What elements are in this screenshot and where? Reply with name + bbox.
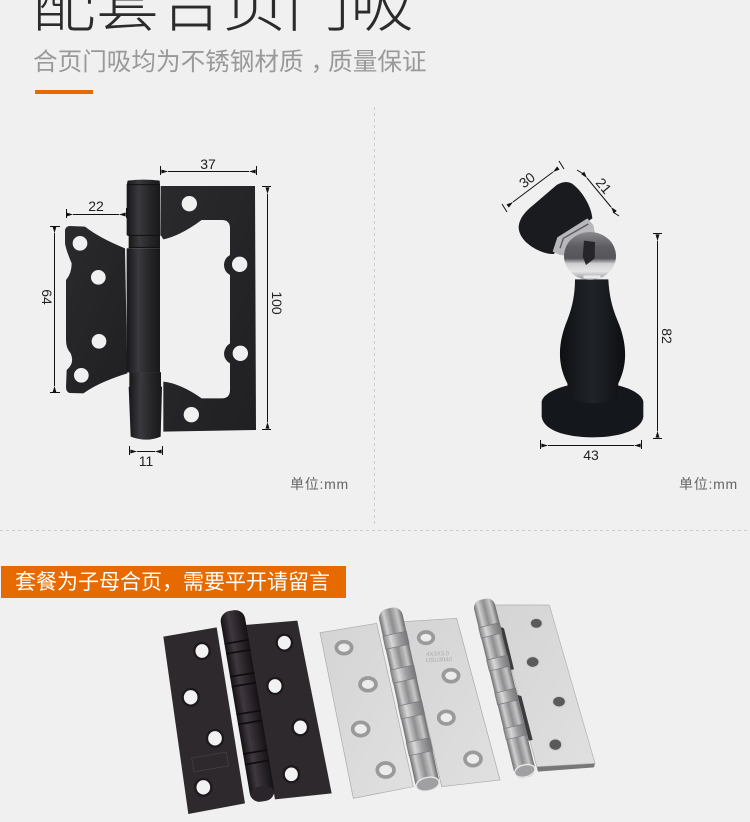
steel hinge folded	[472, 597, 595, 780]
stopper chrome collar	[553, 218, 595, 257]
orange accent bar	[35, 90, 93, 94]
stopper dimension lines	[502, 161, 662, 449]
dimension: 22: 22	[88, 198, 104, 214]
dimension: 37: 37	[200, 156, 216, 172]
door stopper drawing	[519, 182, 643, 437]
hinge right leaf	[161, 186, 256, 432]
hinge dimension lines	[50, 166, 271, 455]
steel hinge open: USU3040	[426, 657, 453, 664]
dimension: 82: 82	[659, 328, 675, 344]
dimension: 30: 30	[516, 169, 538, 191]
banner: package note	[1, 566, 346, 598]
dimension: 64: 64	[39, 289, 55, 305]
black ball-bearing hinge	[163, 609, 332, 814]
steel hinge open: 4X3X3.0	[426, 651, 450, 658]
banner: package note: 套餐为子母合页，需要平开请留言	[15, 571, 330, 594]
dimension: 21: 21	[593, 175, 615, 197]
dimension: 100: 100	[269, 291, 285, 315]
stopper base	[542, 383, 643, 437]
unit label: hinge: 单位:mm	[290, 476, 349, 492]
stopper chrome ball	[564, 232, 616, 280]
dimension: 43: 43	[583, 447, 599, 463]
stopper head	[519, 182, 592, 254]
steel hinge open	[320, 606, 500, 798]
unit label: door stopper: 单位:mm	[679, 476, 738, 492]
subtitle: 合页门吸均为不锈钢材质 ，质量保证	[33, 49, 427, 76]
dimension: 11: 11	[139, 453, 153, 469]
hinge drawing	[65, 180, 256, 440]
stopper body	[560, 279, 625, 403]
hinge left leaf	[65, 226, 127, 393]
hinge barrel	[127, 180, 162, 440]
